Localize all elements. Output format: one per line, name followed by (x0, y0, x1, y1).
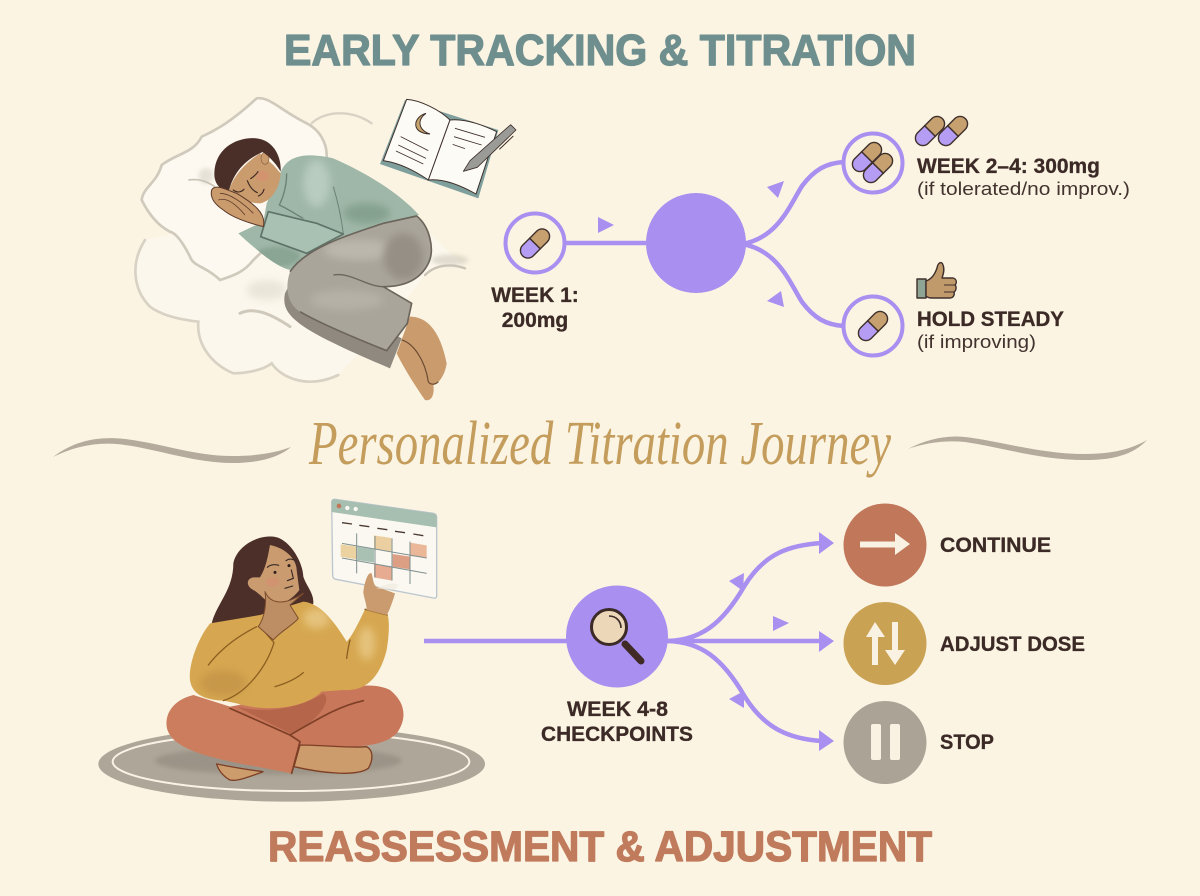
checkpoint label: WEEK 4-8 (567, 698, 668, 721)
head (228, 153, 281, 203)
arm sleeve (261, 212, 343, 253)
back foot (217, 764, 263, 780)
continue option (844, 504, 1051, 586)
direction arrows (729, 573, 789, 708)
stop option (844, 701, 994, 784)
pillow (142, 98, 327, 280)
arrowheads (819, 532, 834, 751)
hold steady label: (if improving) (917, 331, 1036, 352)
checkpoint node (566, 586, 668, 688)
hand on chin (258, 592, 303, 640)
hand (211, 187, 264, 227)
raised hand (363, 573, 395, 615)
illustration: sleeping person with pillow (135, 98, 516, 400)
hair (212, 537, 313, 633)
sweater (190, 602, 389, 708)
trousers (166, 686, 403, 773)
rug (98, 726, 485, 802)
pen (463, 125, 516, 171)
hold steady label: HOLD STEADY (917, 308, 1064, 331)
journal book (380, 99, 516, 198)
adjust dose option (844, 602, 1085, 685)
title: reassessment: REASSESSMENT & ADJUSTMENT (268, 823, 932, 871)
hold steady label (917, 308, 1064, 352)
calendar (332, 499, 437, 598)
title: early tracking: EARLY TRACKING & TITRATION (284, 26, 916, 75)
icon: thumbs up (917, 263, 956, 298)
week 2-4 label: WEEK 2–4: 300mg (917, 155, 1100, 178)
week 1 label: WEEK 1: (491, 284, 579, 307)
sweater (238, 155, 419, 270)
week 2-4 node (844, 134, 902, 192)
week 1 node (506, 214, 564, 272)
hair (214, 138, 281, 193)
icon: two capsules (912, 113, 971, 149)
checkpoint label (541, 698, 693, 746)
week 1 label: 200mg (502, 309, 568, 332)
stop option: STOP (940, 731, 994, 754)
direction arrows (598, 181, 784, 307)
illustration: seated woman with calendar (98, 499, 485, 802)
face (248, 545, 299, 605)
icon: magnifier (592, 610, 641, 661)
feet (397, 317, 447, 400)
flow: early tracking diagram (491, 113, 1130, 356)
connector lines (566, 162, 844, 326)
divider with script heading (53, 410, 1147, 478)
hold steady node (844, 296, 902, 356)
trousers (284, 216, 431, 368)
central decision node (646, 193, 746, 293)
adjust dose option: ADJUST DOSE (940, 633, 1085, 656)
connector lines (424, 639, 822, 643)
flow: reassessment diagram (424, 504, 1085, 784)
continue option: CONTINUE (940, 534, 1051, 557)
front foot (294, 745, 372, 773)
week 2-4 label: (if tolerated/no improv.) (917, 178, 1130, 199)
checkpoint label: CHECKPOINTS (541, 723, 693, 746)
week 2-4 label (917, 155, 1130, 199)
script heading: Personalized Titration Journey (308, 410, 891, 478)
blanket (135, 223, 465, 382)
